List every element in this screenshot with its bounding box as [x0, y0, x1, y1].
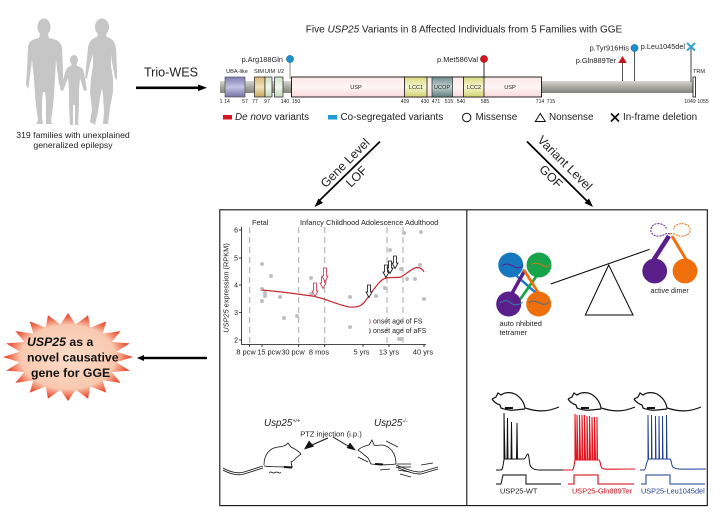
x axis labels: 30 pcw [281, 348, 305, 356]
label: USP25-Leu1045del: USP25-Leu1045del [641, 486, 705, 496]
gene diagram [220, 69, 709, 105]
residue numbers [220, 99, 709, 105]
icon: family silhouettes [26, 18, 117, 125]
domain: TRM [693, 77, 696, 97]
x axis labels [236, 348, 433, 356]
phase labels: Childhood [326, 218, 359, 227]
domain: UIM [265, 77, 272, 97]
variant: p.Gln889Ter: p.Gln889Ter [576, 56, 617, 65]
icon: mouse Gln889Ter [568, 393, 635, 411]
label: USP25-Gln889Ter: USP25-Gln889Ter [572, 486, 633, 496]
legend: co-segregated: Co-segregated variants [340, 112, 443, 123]
label: Usp25 +/+: Usp25 [264, 418, 292, 429]
panel: main frame [220, 210, 707, 506]
legend: missense: Missense [476, 112, 518, 123]
x axis labels: 15 pcw [257, 348, 281, 356]
expression curve [262, 268, 424, 307]
callout: USP25 novel gene burst: novel causative [27, 350, 119, 364]
legend [223, 112, 697, 123]
text: families caption: generalized epilepsy [33, 140, 113, 150]
icon: active dimer [642, 224, 697, 283]
residue numbers: 715 [547, 99, 555, 105]
label: autoinhibited tetramer [500, 319, 542, 337]
domain: SIM [254, 77, 265, 97]
phase labels [252, 218, 438, 227]
text: families caption: 319 families with unexplained [16, 130, 130, 140]
chart legend [370, 318, 427, 335]
arrow: variant level GOF [527, 142, 593, 207]
residue numbers: 1055 [697, 99, 709, 105]
callout: USP25 novel gene burst: USP25 as a [27, 335, 93, 349]
icon: autoinhibited tetramer [496, 252, 552, 316]
y axis labels: 3 [234, 310, 238, 317]
domain labels: LCC2 [467, 85, 481, 91]
label: autoinhibited tetramer: tetramer [500, 328, 528, 337]
phase labels: Fetal [252, 218, 269, 227]
domain: UBA-like [225, 77, 245, 97]
variant: p.Met586Val [437, 55, 488, 78]
callout: USP25 novel gene burst: gene for GGE [31, 366, 110, 380]
x axis labels: 40 yrs [413, 348, 433, 356]
variant: p.Tyr916His: p.Tyr916His [590, 44, 629, 52]
icon: knockout mouse [358, 440, 438, 477]
variant: p.Leu1045del [641, 42, 695, 82]
phase labels: Adolescence [361, 218, 403, 227]
phase labels: Adulthood [405, 218, 438, 227]
domain: LCC2 [464, 77, 484, 97]
chart: USP25 expression [222, 218, 438, 356]
stimulus: Gln889Ter [568, 475, 634, 484]
domain: LCC1 [404, 77, 427, 97]
chart legend: onset age of aFS [373, 328, 427, 335]
icon: mouse Leu1045del [634, 393, 701, 411]
x axis labels: 13 yrs [379, 348, 399, 356]
variant: p.Tyr916His [590, 44, 638, 81]
y axis labels [234, 228, 238, 344]
text: families caption [16, 130, 130, 150]
residue numbers: 409 [401, 99, 409, 105]
domain labels: SIM [254, 69, 264, 75]
label: USP25-WT: USP25-WT [500, 486, 538, 496]
domain labels: LCC1 [409, 85, 423, 91]
icon: mother silhouette [85, 18, 117, 125]
arrow: to conclusion [137, 355, 207, 361]
variant: p.Leu1045del: p.Leu1045del [641, 42, 685, 51]
label: Trio-WES: Trio-WES [144, 66, 198, 80]
domain: UIM2 [274, 77, 283, 97]
stimulus: Leu1045del [641, 475, 705, 484]
trace: Gln889Ter [563, 414, 635, 470]
label: active dimer: active dimer [650, 287, 689, 295]
chart legend: onset age of FS [373, 318, 423, 326]
legend: nonsense: Nonsense [549, 112, 594, 123]
domain: USP [292, 77, 542, 97]
stimulus: WT [496, 475, 561, 484]
onset arrows: aFS [366, 256, 398, 298]
x axis labels: 8 pcw [236, 348, 256, 356]
domain labels: I/2 [278, 69, 284, 75]
arrow: Trio-WES [136, 84, 207, 91]
label: Usp25 -/-: Usp25 [374, 418, 402, 429]
residue numbers: 471 [432, 99, 440, 105]
domain: UCH [432, 77, 452, 97]
residue numbers: 714 [536, 99, 544, 105]
y axis labels: 2 [234, 338, 238, 344]
label: Usp25 -/-: -/- [402, 418, 408, 424]
domain labels: UIM [265, 69, 275, 75]
residue numbers: 14 [224, 99, 230, 105]
residue numbers: 77 [252, 99, 258, 105]
residue numbers: 140 [281, 99, 289, 105]
domain labels: UCOP [434, 85, 450, 91]
residue numbers: 57 [242, 99, 248, 105]
heading: gene variants: Five USP25 Variants in 8 Affected Individuals from 5 Families with GGE [306, 24, 623, 36]
residue numbers: 97 [264, 99, 270, 105]
seesaw [551, 249, 650, 315]
panel: electrophysiology [492, 393, 706, 496]
residue numbers: 1 [220, 99, 223, 105]
y axis labels: 6 [234, 228, 238, 234]
residue numbers: 430 [421, 99, 429, 105]
phase divider lines [250, 227, 403, 344]
label: Variant Level: Variant Level [535, 133, 595, 193]
panel: tetramer to dimer balance [496, 224, 697, 337]
legend: de novo: De novo variants [235, 112, 309, 123]
label: autoinhibited tetramer: auto nhibited [500, 319, 542, 328]
residue numbers: 585 [481, 99, 489, 105]
label: Usp25 +/+: +/+ [292, 418, 301, 424]
icon: wild-type mouse [223, 443, 301, 475]
callout: USP25 novel gene burst [3, 313, 133, 401]
variant: p.Met586Val: p.Met586Val [437, 55, 478, 64]
mouse experiment [223, 418, 438, 477]
domain labels: USP [350, 85, 362, 91]
label: GOF: GOF [536, 162, 566, 191]
label: Gene Level: Gene Level [318, 136, 373, 191]
domain labels [226, 69, 705, 91]
domain labels: TRM [693, 69, 705, 75]
y axis labels: 5 [234, 256, 238, 262]
arrow: gene level LOF [314, 142, 380, 207]
label: PTZ injection: PTZ injection (i.p.) [300, 430, 362, 438]
residue numbers: 540 [457, 99, 465, 105]
residue numbers: 150 [292, 99, 300, 105]
y axis title: USP25 expression (RPKM) [222, 243, 230, 333]
variant: p.Arg188Gln [242, 55, 294, 79]
x axis labels: 8 mos [309, 348, 329, 356]
icon: father silhouette [26, 18, 63, 124]
residue numbers: 1049 [684, 99, 696, 105]
variant: p.Arg188Gln: p.Arg188Gln [242, 55, 283, 64]
arrow: PTZ left [304, 438, 328, 450]
trace: WT [496, 413, 564, 470]
phase labels: Infancy [300, 218, 324, 227]
icon: child silhouette [60, 55, 87, 125]
arrow: PTZ right [333, 437, 356, 450]
icon: mouse WT [492, 393, 559, 411]
axes [239, 227, 426, 347]
variant: p.Gln889Ter [576, 56, 627, 81]
domain labels: USP [504, 85, 516, 91]
domain labels: UBA-like [226, 69, 248, 75]
data points [260, 230, 426, 341]
onset arrows: FS [312, 268, 328, 296]
y axis labels: 4 [234, 282, 238, 290]
label: LOF: LOF [343, 163, 370, 190]
legend: in-frame deletion: In-frame deletion [623, 112, 697, 123]
x axis labels: 5 yrs [353, 348, 370, 356]
trace: Leu1045del [640, 415, 706, 470]
protein backbone [220, 81, 693, 93]
residue numbers: 515 [445, 99, 453, 105]
